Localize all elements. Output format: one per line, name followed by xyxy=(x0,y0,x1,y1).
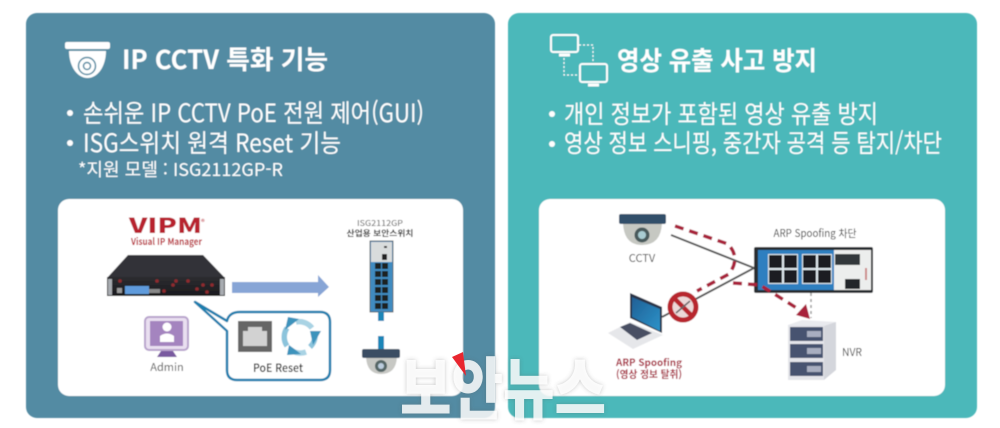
icon: CCTV camera xyxy=(619,214,666,245)
icon: linked monitors xyxy=(551,35,607,85)
heading: IP CCTV: IP CCTV 특화 기능 xyxy=(122,40,328,77)
arrow: VIPM to switch xyxy=(232,275,329,297)
text block: left bullets: *지원 모델 : ISG2112GP-R xyxy=(78,156,283,182)
label: ARP Spoofing warning: (영상 정보 탈취) xyxy=(616,366,682,381)
icon: dome camera (white) xyxy=(65,42,110,78)
industrial switch xyxy=(370,241,393,312)
connection lines xyxy=(662,235,754,317)
icon: red watermark accent xyxy=(452,352,466,376)
text block: left bullets: 손쉬운 IP CCTV PoE 전원 제어(GUI) xyxy=(83,94,424,130)
icon: reset cycle arrows xyxy=(284,317,321,355)
icon: ethernet port xyxy=(238,321,272,352)
icon: laptop xyxy=(608,293,663,349)
label: ARP Spoofing warning: ARP Spoofing xyxy=(615,354,682,369)
callout: PoE Reset xyxy=(195,302,330,380)
label: ARP Spoofing block: ARP Spoofing 차단 xyxy=(774,226,857,241)
text block: right bullets xyxy=(549,95,942,160)
label: CCTV: CCTV xyxy=(629,250,656,266)
heading: video leak: 영상 유출 사고 방지 xyxy=(617,41,817,78)
label: Admin: Admin xyxy=(150,359,184,375)
arrow: spoofing attack path xyxy=(675,226,810,319)
logo: VIPM xyxy=(128,210,205,248)
logo: VIPM: Visual IP Manager xyxy=(130,234,203,248)
logo: VIPM: ® xyxy=(201,217,205,228)
text block: right bullets: 개인 정보가 포함된 영상 유출 방지 xyxy=(564,95,878,131)
logo: VIPM: VIPM xyxy=(128,210,202,240)
label: ARP Spoofing warning xyxy=(615,354,682,381)
icon: NVR stack xyxy=(788,320,836,380)
icon: admin monitor xyxy=(145,317,188,357)
icon: blocked sign xyxy=(668,292,698,322)
text block: left bullets: ISG스위치 원격 Reset 기능 xyxy=(83,124,341,160)
label: PoE Reset: PoE Reset xyxy=(253,360,303,376)
panel: IP CCTV features xyxy=(26,13,495,418)
icon: camera xyxy=(362,349,400,374)
label: ISG2112GP: ISG2112GP xyxy=(357,218,403,229)
panel: VIPM diagram xyxy=(58,199,463,396)
label: ISG2112GP xyxy=(346,218,414,239)
panel: ARP spoofing diagram xyxy=(539,199,945,396)
text block: left bullets xyxy=(67,94,424,182)
dotted link: switch to NVR xyxy=(810,293,812,318)
label: ISG2112GP: 산업용 보안스위치 xyxy=(346,228,414,239)
label: NVR: NVR xyxy=(842,344,862,360)
server appliance xyxy=(107,255,225,296)
switch: ARP Spoofing block xyxy=(754,247,873,293)
panel: video leak prevention xyxy=(508,13,977,418)
cable: switch to camera xyxy=(378,312,384,350)
